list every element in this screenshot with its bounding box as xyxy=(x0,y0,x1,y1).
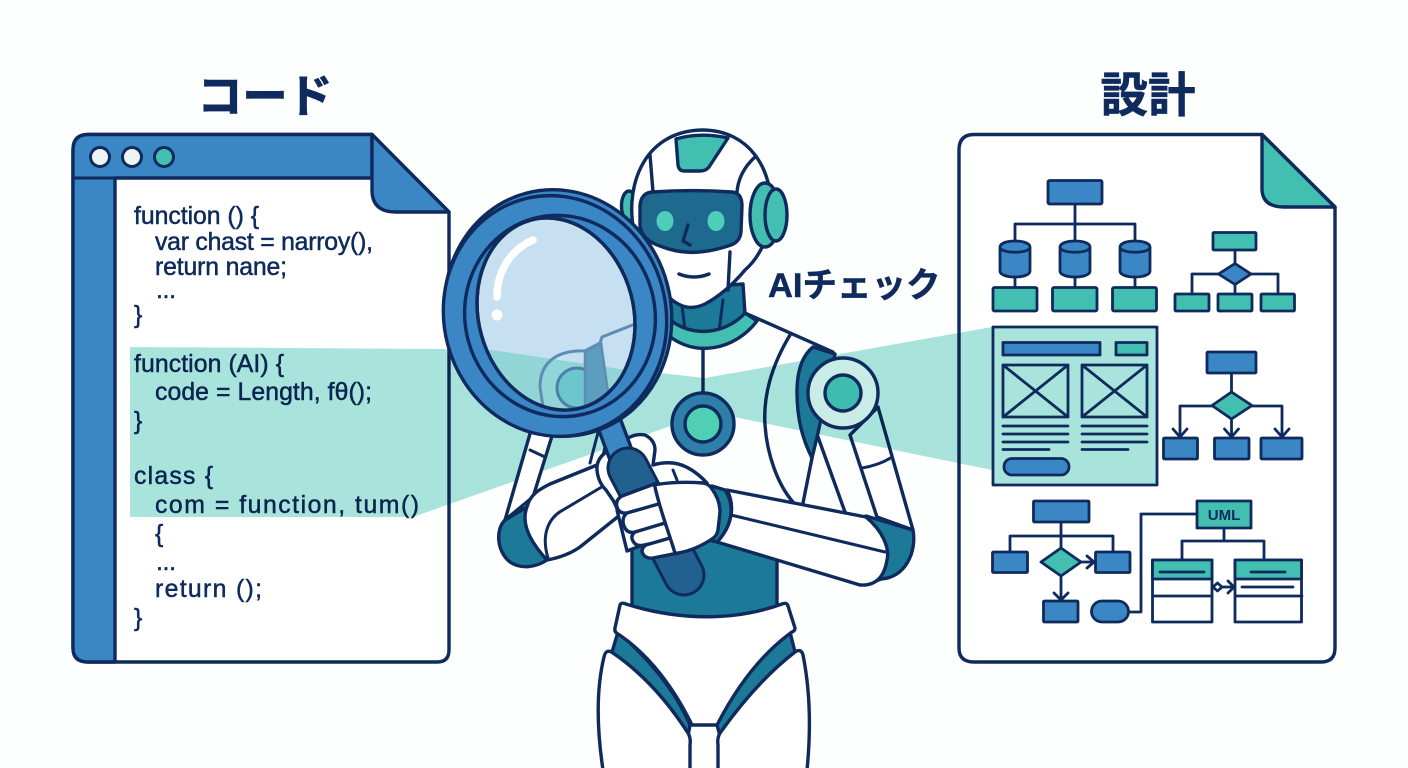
handle grip xyxy=(628,468,684,575)
window title bar and sidebar xyxy=(73,134,372,662)
neck xyxy=(668,284,745,332)
shoulder circle xyxy=(808,358,878,428)
right leg xyxy=(718,651,809,768)
mouth xyxy=(679,274,709,277)
upper right arm xyxy=(850,407,913,530)
thumb wrap xyxy=(597,450,640,506)
right ear cap xyxy=(765,189,787,241)
visor xyxy=(640,190,742,252)
heading: design: 設計 xyxy=(1100,70,1196,123)
right ear xyxy=(750,183,780,247)
folded corner xyxy=(372,134,449,212)
right teal wedge xyxy=(717,632,795,736)
panel: code window xyxy=(73,134,449,662)
code text: code = Length, fθ(); xyxy=(155,379,372,406)
chest medallion xyxy=(672,393,734,455)
diagram: UML class diagram xyxy=(1128,501,1302,622)
pelvis xyxy=(615,603,795,725)
left ear xyxy=(622,191,636,221)
wrist band xyxy=(708,486,731,542)
finger 4 xyxy=(642,538,678,558)
helmet seams xyxy=(650,155,755,290)
diagram: teal decision tree xyxy=(1175,232,1294,311)
code text: } xyxy=(134,408,142,435)
document sheet xyxy=(959,134,1335,662)
robot: legs and pelvis xyxy=(598,530,809,768)
label: AI check: AIチェック xyxy=(768,267,940,305)
robot: torso and right arm xyxy=(703,313,913,530)
front rim xyxy=(416,170,694,462)
inner rim line xyxy=(442,194,678,438)
right cuff xyxy=(865,516,914,585)
left cuff xyxy=(499,507,547,567)
helmet and face xyxy=(632,130,771,307)
nose xyxy=(683,225,690,245)
code text: { xyxy=(155,521,163,548)
left forearm xyxy=(525,465,620,560)
diagram: database tree xyxy=(993,180,1156,311)
magnifying glass xyxy=(416,164,699,575)
window body xyxy=(73,134,449,662)
finger 3 xyxy=(632,523,672,546)
panel: design document xyxy=(959,134,1335,662)
code text xyxy=(134,203,419,632)
eyes xyxy=(656,211,674,231)
lens highlights xyxy=(492,240,533,320)
diagram: lower flowchart xyxy=(992,501,1130,622)
code text: return nane; xyxy=(155,254,287,281)
collar xyxy=(668,313,757,348)
back rim xyxy=(417,164,699,462)
finger 2 xyxy=(623,503,667,532)
chest seams xyxy=(765,335,845,512)
folded corner xyxy=(1262,134,1335,207)
code text: function (AI) { xyxy=(134,351,284,378)
chest connector xyxy=(701,350,705,393)
window buttons xyxy=(90,148,174,166)
shoulder line xyxy=(745,313,833,352)
helmet crest xyxy=(676,135,728,171)
diagram: flowchart with arrows xyxy=(1164,352,1302,459)
left leg xyxy=(598,651,690,768)
robot: head xyxy=(622,130,787,348)
handle neck xyxy=(598,418,632,460)
code text: } xyxy=(134,605,142,632)
palm band xyxy=(617,510,640,551)
code text: function () { xyxy=(134,203,259,230)
code text: ... xyxy=(156,549,176,576)
back of hand xyxy=(655,482,720,553)
upper left arm xyxy=(505,420,557,520)
diagram: highlighted wireframe xyxy=(993,327,1157,485)
code text: com = function, tum() xyxy=(155,492,419,519)
heading: code: コード xyxy=(197,71,333,122)
code text: var chast = narroy(), xyxy=(155,229,373,256)
code text: class { xyxy=(134,463,213,490)
lens xyxy=(456,200,656,428)
lens outline xyxy=(456,200,656,428)
robot: right forearm and gripping hand xyxy=(617,482,914,585)
view through lens xyxy=(488,323,634,408)
fingers behind handle xyxy=(625,435,707,510)
finger 1 xyxy=(617,483,664,513)
robot: left arm xyxy=(499,420,707,567)
left teal wedge xyxy=(612,632,690,736)
UML label: UML xyxy=(1208,507,1240,524)
code text: ... xyxy=(156,277,176,304)
code text: } xyxy=(134,302,142,329)
torso lower xyxy=(632,530,777,618)
shoulder dark joint xyxy=(797,347,835,458)
robot: shoulder joint and chest medallion xyxy=(672,347,878,458)
code text: return (); xyxy=(155,576,262,603)
scan beam xyxy=(130,327,992,517)
right forearm xyxy=(717,490,888,585)
